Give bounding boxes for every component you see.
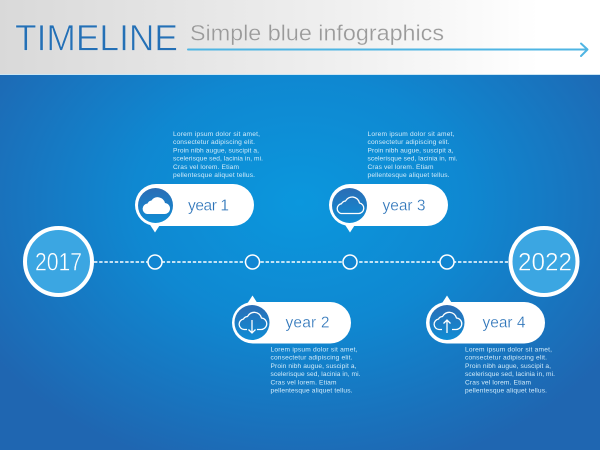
panel: year 1 (135, 131, 263, 232)
end year circle: 2022 (518, 248, 572, 276)
panel: year 2 (232, 296, 361, 394)
subtitle: Simple blue infographics (190, 20, 444, 46)
text block: year 1: Lorem ipsum dolor sit amet, (173, 131, 260, 138)
label: year 2: year 2 (286, 314, 330, 332)
text block: year 4: scelerisque sed, lacinia in, mi. (465, 371, 555, 378)
text block: year 3: Proin nibh augue, suscipit a, (368, 147, 454, 154)
text block: year 2: Cras vel lorem. Etiam (270, 379, 337, 386)
title: TIMELINE (15, 16, 178, 58)
text block: year 1: scelerisque sed, lacinia in, mi. (173, 156, 263, 163)
text block: year 1: Proin nibh augue, suscipit a, (173, 147, 259, 154)
text block: year 2: consectetur adipiscing elit. (270, 355, 353, 362)
text block: year 2 (270, 346, 361, 394)
label: year 4: year 4 (482, 314, 526, 332)
start year circle (25, 228, 92, 295)
timeline node 2 (246, 255, 260, 269)
header band (0, 0, 600, 75)
arrow: header (188, 44, 588, 56)
text block: year 4: Lorem ipsum dolor sit amet, (465, 346, 552, 354)
text block: year 3: consectetur adipiscing elit. (368, 139, 450, 146)
timeline node 1 (148, 255, 162, 269)
text block: year 1: consectetur adipiscing elit. (173, 139, 255, 146)
text block: year 1: Cras vel lorem. Etiam (173, 164, 240, 171)
pill: year 2 (232, 296, 351, 344)
text block: year 3: scelerisque sed, lacinia in, mi. (368, 156, 458, 163)
text block: year 3: pellentesque aliquet tellus. (368, 172, 450, 179)
text block: year 4 (465, 346, 555, 394)
icon: cloud upload (430, 305, 464, 340)
start year circle: 2017 (35, 248, 82, 276)
label: year 3: year 3 (382, 198, 426, 214)
timeline dashed line (94, 261, 508, 263)
text block: year 3: Lorem ipsum dolor sit amet, (368, 131, 455, 138)
text block: year 3: Cras vel lorem. Etiam (368, 164, 434, 171)
text block: year 4: pellentesque aliquet tellus. (465, 388, 547, 394)
label: year 1: year 1 (188, 198, 229, 214)
text block: year 2: pellentesque aliquet tellus. (270, 388, 353, 394)
pill: year 4 (426, 296, 545, 344)
panel: year 3 (329, 131, 458, 232)
timeline node 4 (440, 255, 454, 269)
pill: year 1 (135, 184, 254, 232)
pill: year 3 (329, 184, 448, 232)
text block: year 3 (368, 131, 458, 179)
text block: year 4: Proin nibh augue, suscipit a, (465, 363, 551, 370)
text block: year 1: pellentesque aliquet tellus. (173, 172, 255, 179)
end year circle (510, 228, 578, 295)
icon: cloud download (234, 305, 270, 340)
text block: year 2: Lorem ipsum dolor sit amet, (270, 346, 358, 354)
text block: year 2: Proin nibh augue, suscipit a, (270, 363, 357, 370)
text block: year 2: scelerisque sed, lacinia in, mi. (270, 371, 361, 378)
text block: year 4: consectetur adipiscing elit. (465, 355, 547, 362)
text block: year 1 (173, 131, 263, 179)
panel: year 4 (426, 296, 555, 394)
timeline node 3 (343, 255, 357, 269)
icon: filled cloud (138, 188, 173, 223)
icon: outline cloud (332, 188, 367, 223)
text block: year 4: Cras vel lorem. Etiam (465, 379, 532, 386)
